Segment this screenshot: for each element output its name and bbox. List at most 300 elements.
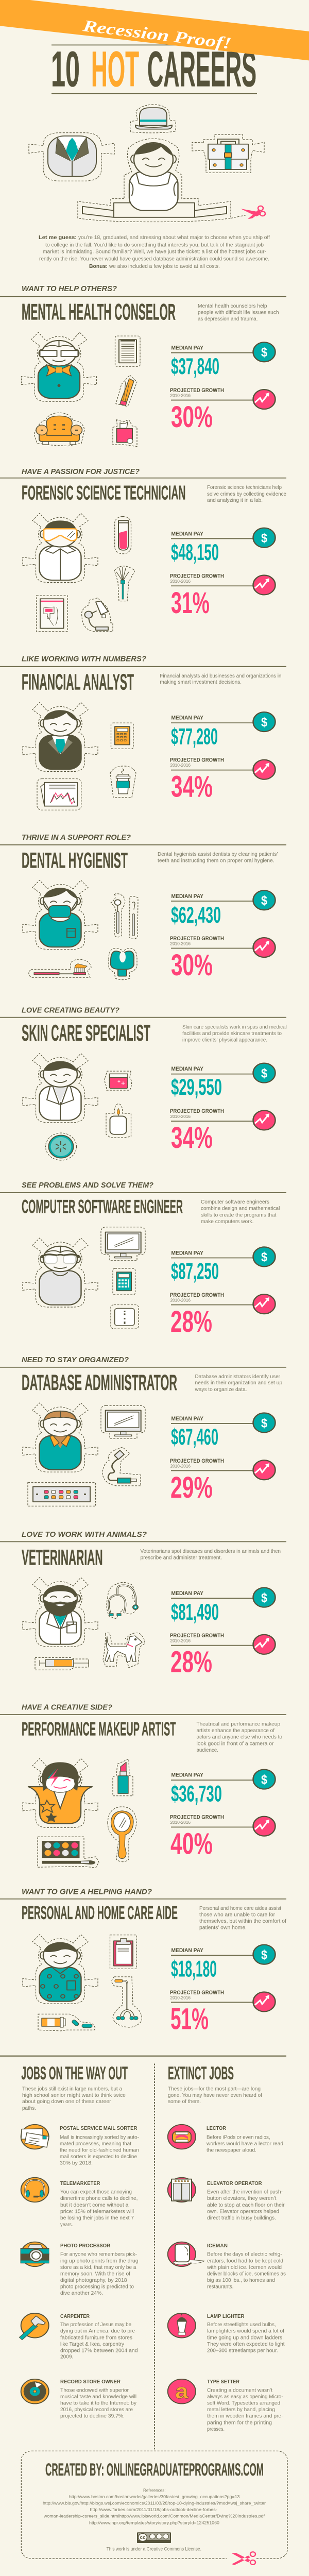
description: make computers work. <box>201 1219 253 1225</box>
stat: projected growth <box>170 1990 275 2036</box>
stat: projected growth: 2010-2016 <box>170 1298 191 1302</box>
stat: median pay: MEDIAN PAY <box>171 1948 203 1954</box>
item: elevator operator: able to stop at each floor on their <box>207 2202 285 2208</box>
item: iceman: deliver blocks of ice, sometimes as <box>207 2272 286 2277</box>
item: lector: workers would have a lector read <box>206 2142 283 2147</box>
title <box>51 41 256 97</box>
stat: median pay <box>171 890 275 927</box>
intro text: market is intimidating. Sound familiar? Well, we have just the ticket: a list of the hottest jobs cur- <box>43 249 266 255</box>
panel: footer credits <box>21 2451 287 2565</box>
intro: paths. <box>22 2106 36 2111</box>
icon: usb cable <box>102 1447 141 1486</box>
icon: newspaper <box>37 779 81 810</box>
stat: median pay: MEDIAN PAY <box>171 1416 203 1422</box>
description: combine design and mathematical <box>201 1206 280 1211</box>
intro <box>168 2087 262 2105</box>
stat: median pay: MEDIAN PAY <box>171 345 203 351</box>
heading: THRIVE IN A SUPPORT ROLE? <box>22 833 131 842</box>
description: skills to create the programs that <box>201 1213 277 1218</box>
stat: projected growth: PROJECTED GROWTH <box>170 1633 224 1639</box>
item: telemarketer: You can expect those annoying <box>60 2190 132 2195</box>
icon: cucumber slice <box>45 1133 76 1160</box>
creative commons badge <box>137 2532 171 2543</box>
stat: median pay: MEDIAN PAY <box>171 894 203 900</box>
description <box>198 303 279 322</box>
item: carpenter: CARPENTER <box>60 2314 90 2319</box>
title rule bottom <box>52 93 257 94</box>
description: Skin care specialists work in spas and medical <box>182 1025 287 1030</box>
icon: coffee cup <box>110 766 136 798</box>
stat: projected growth: 34% <box>171 770 213 804</box>
description: needs in their organization and set up <box>195 1381 282 1386</box>
stat: median pay: MEDIAN PAY <box>171 531 203 537</box>
heading: WANT TO HELP OTHERS? <box>22 284 117 293</box>
stat: projected growth: 2010-2016 <box>170 1995 191 2000</box>
panel: veterinarian <box>0 1530 286 1679</box>
panel: personal and home care aide <box>0 1887 286 2036</box>
references: http://www.forbes.com/2011/01/18/jobs-outlook-decline-forbes- <box>90 2507 217 2512</box>
icon: evidence bag <box>37 596 67 632</box>
intro text: we also included a few jobs to avoid at all costs. <box>109 264 220 269</box>
item: lamp lighter: LAMP LIGHTER <box>207 2314 245 2319</box>
item: telemarketer: dinnertime phone calls to decline, <box>60 2196 138 2201</box>
icon: suit cut-out <box>29 133 114 181</box>
stat: projected growth: 2010-2016 <box>170 579 191 584</box>
stat: projected growth: 30% <box>171 948 213 982</box>
stat: projected growth: PROJECTED GROWTH <box>170 936 224 942</box>
item: elevator operator: own. Elevator operators helped <box>207 2209 279 2214</box>
stat: median pay <box>171 1413 275 1449</box>
stat: median pay <box>171 1247 275 1284</box>
character: hero <box>78 139 231 222</box>
icon: walking cane <box>112 1977 142 2027</box>
item: postal service mail sorter <box>21 2125 139 2166</box>
banner: Recession Proof! <box>81 17 232 53</box>
item: iceman: restaurants. <box>207 2284 233 2290</box>
stat: projected growth <box>170 1815 275 1861</box>
icon: tooth bottle <box>109 948 137 980</box>
references <box>43 2488 266 2525</box>
item: carpenter: 2009. <box>60 2354 73 2360</box>
icon: briefcase cut-out <box>192 134 264 173</box>
stat: median pay: $ <box>261 1250 267 1264</box>
stat: median pay: $ <box>261 893 267 908</box>
stat: projected growth <box>170 388 275 434</box>
title: 10 <box>51 41 80 97</box>
icon: toothbrush <box>29 959 91 977</box>
stat: projected growth <box>170 757 275 804</box>
icon: code sheet <box>111 1305 139 1329</box>
item: elevator operator: Even after the invention of push- <box>207 2190 283 2195</box>
item: carpenter: dropped 17% between 2004 and <box>60 2348 138 2353</box>
item: photo processor: ing up photo prints from the drug <box>60 2259 139 2264</box>
intro text: rently on the rise. You never would have guessed database administration could sound so awesome. <box>39 257 269 262</box>
references: References: <box>143 2488 165 2493</box>
stat: projected growth: PROJECTED GROWTH <box>170 1990 224 1996</box>
item: postal service mail sorter: mail sorters is expected to decline <box>60 2155 137 2160</box>
icon: desktop monitor <box>101 1405 145 1438</box>
stat: median pay: MEDIAN PAY <box>171 1591 203 1597</box>
item: photo processor: store as a kid, that may only be a <box>60 2265 136 2270</box>
description: Mental health counselors help <box>198 303 267 309</box>
description <box>201 1200 280 1225</box>
item: type setter: them in wooden frames and pre- <box>207 2414 283 2419</box>
license note: This work is under a Creative Commons License. <box>107 2546 201 2551</box>
description <box>207 485 286 503</box>
icon: dog <box>103 1633 145 1668</box>
item: elevator operator: button elevators, they weren’t <box>207 2196 277 2201</box>
heading: HAVE A PASSION FOR JUSTICE? <box>22 467 140 476</box>
item: type setter: TYPE SETTER <box>207 2379 239 2385</box>
intro: high school senior might want to think twice <box>22 2093 126 2098</box>
stat: median pay: $ <box>261 345 267 360</box>
item: postal service mail sorter: mated processes, meaning that <box>60 2142 131 2147</box>
item: type setter <box>168 2379 283 2432</box>
character: software engineer <box>23 1238 98 1307</box>
item: record store owner <box>21 2379 137 2419</box>
icon: pills <box>38 2014 95 2031</box>
stat: projected growth: 2010-2016 <box>170 1114 191 1119</box>
item: photo processor: photo processing is predicted to <box>60 2284 134 2290</box>
character: makeup artist <box>23 1758 98 1827</box>
title: HOT <box>91 41 139 97</box>
icon: notepad <box>115 336 140 366</box>
item: iceman <box>168 2242 286 2290</box>
description: prescribe and administer treatment. <box>140 1555 222 1561</box>
item: photo processor: digital photography, by 2018 <box>60 2278 127 2283</box>
stat: projected growth: 28% <box>170 1646 212 1679</box>
panel: dental hygienist: DENTAL HYGIENIST <box>22 848 128 873</box>
item: elevator operator: ELEVATOR OPERATOR <box>207 2181 262 2187</box>
icon: calculator <box>113 1268 135 1295</box>
character: database administrator <box>23 1403 98 1472</box>
heading: LOVE TO WORK WITH ANIMALS? <box>22 1530 147 1539</box>
stat: projected growth: PROJECTED GROWTH <box>170 757 224 764</box>
stat: median pay <box>171 1945 275 1981</box>
stat: projected growth: 51% <box>170 2003 209 2036</box>
intro: some of them. <box>168 2099 201 2105</box>
icon: pencil <box>116 375 137 406</box>
stat: median pay: $18,180 <box>171 1956 217 1981</box>
item: type setter: always as easy as opening Micro- <box>207 2394 283 2400</box>
description <box>195 1374 282 1393</box>
panel: veterinarian: VETERINARIAN <box>22 1545 103 1570</box>
item: lector: LECTOR <box>207 2125 226 2131</box>
item: photo processor: PHOTO PROCESSOR <box>60 2243 110 2249</box>
item: photo processor <box>21 2242 139 2296</box>
item: photo processor: For anyone who remembers pick- <box>60 2252 137 2257</box>
stat: projected growth: 34% <box>171 1122 213 1155</box>
description <box>140 1549 281 1561</box>
stat: median pay: $36,730 <box>171 1781 222 1806</box>
stat: median pay: $67,460 <box>171 1424 218 1449</box>
stat: median pay: $48,150 <box>171 539 219 565</box>
stat: projected growth: 2010-2016 <box>170 1464 191 1468</box>
stat: median pay <box>171 528 275 565</box>
stat: projected growth: PROJECTED GROWTH <box>170 388 224 394</box>
stat: median pay: $77,280 <box>171 723 218 749</box>
intro: about going down one of these career <box>22 2099 111 2105</box>
item: type setter: paring them for the printing <box>207 2420 272 2426</box>
stat: median pay: $81,490 <box>171 1599 219 1624</box>
item: type setter: presses. <box>207 2427 225 2432</box>
item: postal service mail sorter: POSTAL SERVICE MAIL SORTER <box>60 2125 138 2131</box>
intro: These jobs—for the most part—are long <box>168 2087 261 2092</box>
stat: median pay <box>171 1063 275 1100</box>
intro text: Bonus: <box>89 264 108 269</box>
icon: candle <box>106 1104 131 1138</box>
description: audience. <box>197 1748 218 1753</box>
stat: projected growth: PROJECTED GROWTH <box>170 1815 224 1821</box>
icon: scissors <box>227 2552 256 2565</box>
icon: test tube <box>115 516 131 554</box>
item: record store owner: 2016, physical record stores are <box>60 2408 133 2413</box>
item: lamp lighter: Before streetlights used bulbs, <box>207 2322 276 2328</box>
icon: armchair <box>34 413 84 446</box>
item: lector: Before iPods or even radios, <box>207 2135 270 2140</box>
stat: projected growth: PROJECTED GROWTH <box>170 1459 224 1464</box>
stat: projected growth: 2010-2016 <box>170 1820 191 1825</box>
stat: projected growth: 28% <box>170 1306 212 1338</box>
stat: projected growth: 2010-2016 <box>170 393 191 398</box>
description: Financial analysts aid businesses and organizations in <box>160 673 282 679</box>
stat: median pay: MEDIAN PAY <box>171 1066 203 1072</box>
item: telemarketer: be losing their jobs in the next 7 <box>60 2215 134 2221</box>
description: teeth and instructing them on proper oral hygiene. <box>158 858 274 863</box>
icon: makeup palette and brush <box>38 1837 99 1868</box>
stat: projected growth: 29% <box>170 1471 213 1504</box>
item: lamp lighter <box>168 2313 285 2353</box>
panel: computer software engineer <box>0 1181 286 1338</box>
panel: skin care specialist <box>0 1006 287 1160</box>
item: photo processor: memory soon. With the rise of <box>60 2272 130 2277</box>
item: carpenter <box>19 2313 138 2360</box>
stat: median pay: $ <box>261 531 267 545</box>
stat: projected growth <box>170 1109 275 1155</box>
description <box>160 673 282 685</box>
character: financial analyst <box>23 702 98 772</box>
panel: mental health counselor <box>0 284 286 447</box>
stat: median pay: $ <box>261 715 267 730</box>
stat: median pay <box>171 712 275 749</box>
description <box>199 1906 286 1931</box>
stat: median pay: MEDIAN PAY <box>171 1772 203 1778</box>
panel: performance makeup artist <box>0 1703 286 1868</box>
stat: projected growth: PROJECTED GROWTH <box>170 1293 224 1298</box>
item: record store owner: have to take it to the Internet: by <box>60 2401 137 2406</box>
references: http://www.boston.com/bostonworks/galleries/30fastest_growing_occupations?pg=13 <box>69 2494 239 2499</box>
description: people with difficult life issues such <box>198 310 279 315</box>
item: lector: the newspaper aloud. <box>207 2148 256 2153</box>
stat: projected growth <box>170 1293 275 1338</box>
panel: database administrator <box>0 1355 286 1506</box>
item: postal service mail sorter: Mail is increasingly sorted by auto- <box>60 2135 139 2140</box>
item: type setter: soft Word. Typesetters arranged <box>207 2401 280 2406</box>
stat: projected growth: 30% <box>171 400 213 434</box>
panel: forensic science technician <box>0 467 286 632</box>
stat: median pay: MEDIAN PAY <box>171 715 203 721</box>
description: improve clients’ physical appearance. <box>182 1038 267 1043</box>
icon: lipstick <box>113 1759 133 1796</box>
references: woman-leadership-careers_slide.htmlhttp://www.ibisworld.com/Common/MediaCenter/Dying%20Industries.pdf <box>43 2514 265 2519</box>
stat: projected growth <box>170 573 275 620</box>
description <box>197 1722 282 1753</box>
item: telemarketer: but it doesn’t come without a <box>60 2202 129 2208</box>
intro text <box>39 235 270 269</box>
stat: median pay: $87,250 <box>171 1258 219 1284</box>
references: http://www.bls.gov/http://blogs.wsj.com/economics/2011/03/28/top-10-dying-industries/?mod=wsj_share_twitter <box>43 2501 266 2505</box>
description: as depression and trauma. <box>198 317 258 322</box>
description: Computer software engineers <box>201 1200 269 1205</box>
heading: LOVE CREATING BEAUTY? <box>22 1006 119 1014</box>
text: JOBS ON THE WAY OUT <box>21 2063 128 2083</box>
item: photo processor: dive another 24%. <box>60 2291 103 2296</box>
icon: dental pick <box>129 896 138 939</box>
description: solve crimes by collecting evidence <box>207 492 286 497</box>
item: lamp lighter: lamplighters would spend a lot of <box>207 2329 284 2334</box>
item: iceman: erators, food had to be kept cold <box>207 2259 283 2264</box>
icon: hand mirror <box>108 1807 136 1862</box>
item: record store owner: musical taste and knowledge will <box>60 2394 136 2400</box>
item: carpenter: like Target & Ikea, carpentry <box>60 2342 125 2347</box>
intro text: Let me guess: <box>39 235 77 241</box>
icon: network switch <box>28 1483 96 1506</box>
item: record store owner: Those endowed with superior <box>60 2388 129 2393</box>
character: home care aide <box>23 1935 98 2004</box>
description: Personal and home care aides assist <box>199 1906 281 1911</box>
stat: median pay <box>171 1588 275 1624</box>
stat: projected growth: 2010-2016 <box>170 1638 191 1643</box>
stat: projected growth <box>170 1459 275 1504</box>
icon: calculator <box>111 723 133 749</box>
item: postal service mail sorter: 30% by 2018. <box>60 2161 93 2166</box>
icon: syringe <box>35 1657 89 1670</box>
stat: projected growth: 31% <box>171 586 210 620</box>
intro text: you’re 18, graduated, and stressing about what major to choose when you ship off <box>78 235 270 241</box>
item: type setter: Creating a document wasn’t <box>207 2388 272 2393</box>
intro: These jobs still exist in large numbers, but a <box>22 2087 122 2092</box>
panel: financial analyst <box>0 655 286 810</box>
stat: median pay: $62,430 <box>171 902 221 927</box>
stat: projected growth <box>170 1633 275 1679</box>
creative commons badge: cc <box>140 2535 146 2540</box>
item: type setter: a <box>175 2380 189 2403</box>
panel: jobs on the way out <box>19 2063 139 2419</box>
icon: stethoscope <box>107 1582 138 1619</box>
description: Dental hygienists assist dentists by cleaning patients’ <box>158 852 278 857</box>
character: dental hygienist <box>23 880 98 950</box>
icon: clipboard <box>110 1935 136 1969</box>
description: making smart investment decisions. <box>160 680 242 685</box>
description: artists enhance the appearance of <box>197 1728 274 1734</box>
icon: microscope <box>82 598 113 632</box>
item: telemarketer <box>21 2178 138 2228</box>
description: patients’ own home. <box>199 1925 247 1931</box>
title rule top <box>52 44 257 45</box>
stat: median pay: $ <box>261 1772 267 1787</box>
item: telemarketer: years. <box>60 2222 73 2228</box>
stat: median pay: MEDIAN PAY <box>171 1250 203 1256</box>
item: type setter: metal letters by hand, placing <box>207 2408 275 2413</box>
stat: median pay: $ <box>261 1066 267 1080</box>
item: carpenter: fabricated furniture from stores <box>60 2335 132 2341</box>
stat: median pay: $ <box>261 1947 267 1962</box>
description: ways to organize data. <box>195 1387 247 1393</box>
stat: projected growth: 2010-2016 <box>170 763 191 768</box>
heading: SEE PROBLEMS AND SOLVE THEM? <box>22 1181 153 1190</box>
description: and analyzing it in a lab. <box>207 498 263 503</box>
description: facilities and provide skincare treatments to <box>182 1031 282 1037</box>
stat: projected growth: 40% <box>170 1827 213 1861</box>
icon: dental mirror <box>111 894 125 937</box>
intro <box>22 2087 126 2111</box>
item: iceman: with plain old ice. Icemen would <box>207 2265 282 2270</box>
item: lamp lighter: 200–300 streetlamps per hour. <box>207 2348 278 2353</box>
item: iceman: big as 100 lbs., to homes and <box>207 2278 275 2283</box>
item: carpenter: The profession of Jesus may be <box>60 2322 131 2328</box>
icon: cream jar <box>105 1071 132 1090</box>
heading: NEED TO STAY ORGANIZED? <box>22 1355 129 1364</box>
icon: scissors <box>231 206 265 219</box>
item: iceman: ICEMAN <box>207 2243 228 2249</box>
description: Database administrators identify user <box>195 1374 281 1380</box>
stat: median pay <box>171 342 275 379</box>
character: forensic technician <box>23 513 98 582</box>
item: elevator operator <box>168 2178 285 2221</box>
stat: median pay: $29,550 <box>171 1074 222 1100</box>
item: telemarketer: price: 15% of telemarketers will <box>60 2209 134 2214</box>
stat: median pay: $ <box>261 1416 267 1430</box>
description: those who are unable to care for <box>199 1912 276 1918</box>
character: counselor <box>22 332 97 401</box>
panel: dental hygienist <box>0 833 286 982</box>
stat: projected growth: 2010-2016 <box>170 941 191 946</box>
item: telemarketer: TELEMARKETER <box>60 2181 100 2187</box>
stat: projected growth: PROJECTED GROWTH <box>170 573 224 579</box>
icon: tissue box <box>113 420 137 447</box>
item: record store owner: projected to decline 39.7%. <box>60 2414 125 2419</box>
item: lamp lighter: time going up and down ladders. <box>207 2335 284 2341</box>
intro text: to college in the fall. You’d like to do something that interests you, but talk of the stagnant job <box>45 243 264 248</box>
stat: median pay: $37,840 <box>171 353 219 379</box>
description: look good in front of a camera or <box>197 1741 274 1747</box>
banner <box>0 0 309 60</box>
description: Veterinarians spot diseases and disorders in animals and then <box>140 1549 281 1554</box>
stat: projected growth: PROJECTED GROWTH <box>170 1109 224 1114</box>
stat: median pay: $ <box>261 1590 267 1605</box>
description <box>158 852 278 863</box>
description: actors and anyone else who needs to <box>197 1735 282 1740</box>
item: iceman: Before the days of electric refrig- <box>207 2252 282 2257</box>
panel: extinct jobs <box>168 2063 286 2432</box>
heading: LIKE WORKING WITH NUMBERS? <box>22 655 146 663</box>
panel: financial analyst: FINANCIAL ANALYST <box>22 669 134 694</box>
description: Theatrical and performance makeup <box>197 1722 280 1727</box>
stat: projected growth <box>170 936 275 982</box>
item: lamp lighter: They were often expected to light <box>207 2342 285 2347</box>
heading: WANT TO GIVE A HELPING HAND? <box>22 1887 152 1896</box>
description: themselves, but within the comfort of <box>199 1919 286 1924</box>
item: carpenter: dying out in America: due to pre- <box>60 2329 137 2334</box>
description <box>182 1025 287 1043</box>
references: http://www.npr.org/templates/story/story.php?storyId=124251060 <box>89 2520 219 2525</box>
item: record store owner: RECORD STORE OWNER <box>60 2379 121 2385</box>
heading: HAVE A CREATIVE SIDE? <box>22 1703 112 1711</box>
description: Forensic science technicians help <box>207 485 282 490</box>
icon: bowler hat <box>130 105 176 133</box>
item: lector <box>168 2125 283 2153</box>
character: skin care specialist <box>23 1054 98 1123</box>
